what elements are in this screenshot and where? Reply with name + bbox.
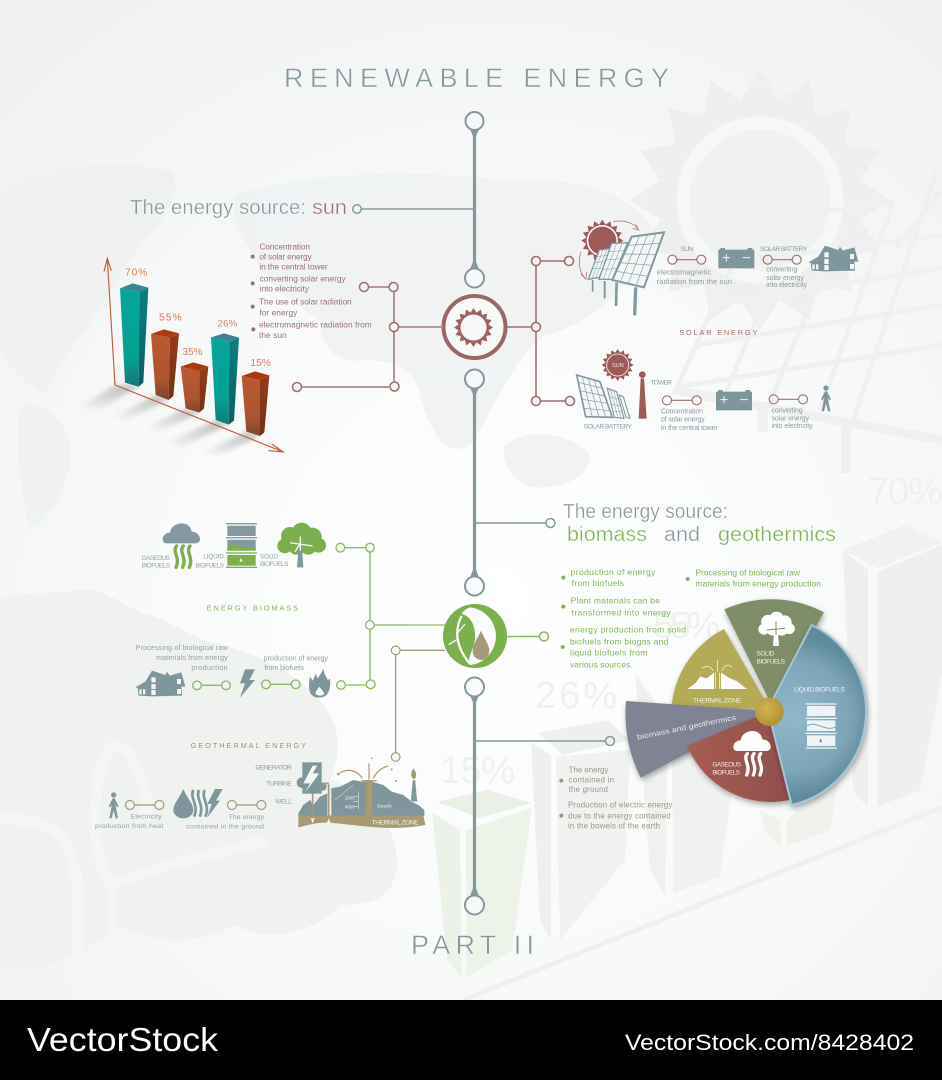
- labels: lower row: solar energy: [772, 416, 809, 423]
- labels: top row: SUN: [681, 246, 694, 253]
- slice: liquid biofuels: LIQUID BIOFUELS: [794, 687, 846, 694]
- heading: biomass and geothermics: biomass: [567, 524, 647, 546]
- labels: geothermal: production from heat: [95, 823, 163, 830]
- labels: biofuels: LIQUID: [203, 554, 224, 561]
- text block: biomass list: from biofuels: [572, 578, 624, 588]
- heading: energy source sun: sun: [312, 197, 347, 219]
- labels: lower row: in the central tower: [661, 425, 718, 432]
- heading: biomass and geothermics: geothermics: [718, 524, 836, 546]
- text: processing: production: [191, 664, 228, 672]
- connector: battery to house: [763, 255, 801, 264]
- slice: thermal zone: THERMAL ZONE: [693, 697, 742, 704]
- watermark: solar panel: [673, 170, 942, 473]
- text block: solar list: [251, 241, 372, 340]
- text block: solar list: the sun: [259, 330, 287, 340]
- watermark: percentages: 26%: [535, 675, 617, 717]
- icon: drop waves bolt: [173, 789, 223, 818]
- icon: thermal zone cross-section: 4800: [345, 804, 355, 809]
- text block: solar list: Concentration: [259, 241, 310, 251]
- watermark: tree canopy: [0, 589, 397, 971]
- labels: geothermal: GENERATOR: [255, 765, 292, 772]
- central spine: [465, 112, 484, 914]
- watermark: world map: [0, 165, 655, 530]
- text block: biomass list: materials from energy production: [695, 579, 821, 589]
- label: geothermal energy: GEOTHERMAL ENERGY: [191, 741, 306, 750]
- icon: gaseous biofuels: [163, 523, 200, 567]
- icon: house: [808, 246, 858, 271]
- connector: sun to battery: [668, 255, 706, 264]
- labels: top row: [657, 246, 808, 289]
- slice: solid biofuels: SOLID: [757, 650, 775, 657]
- text block: geothermal list: Production of electric energy: [568, 801, 672, 810]
- connectors: solar left: [292, 282, 443, 392]
- bar 15%: 15%: [250, 358, 271, 369]
- bar 26%: 26%: [218, 318, 237, 328]
- text block: geothermal list: the ground: [569, 785, 608, 794]
- labels: lower row: Concentration: [661, 408, 703, 415]
- labels: geothermal: [95, 765, 292, 831]
- slice: biomass and geothermics: [625, 701, 757, 778]
- icon: thermal zone cross-section: 2800: [345, 796, 355, 801]
- connector: biomass list node: [507, 632, 548, 641]
- icon: person: [821, 385, 831, 411]
- pie hub: [755, 697, 784, 726]
- panel: energy biomass: [135, 523, 330, 698]
- bar 55%: [151, 313, 182, 400]
- text block: biomass list: transformed into energy: [572, 607, 671, 617]
- labels: lower row: of solar energy: [661, 417, 705, 424]
- chart axes: [104, 258, 283, 452]
- labels: lower row: SOLAR BATTERY: [584, 424, 633, 431]
- slice: thermal zone: [671, 629, 764, 709]
- icon: sun badge: SUN: [612, 363, 624, 369]
- text: processing: Processing of biological raw: [136, 644, 228, 652]
- watermark: large bars: [432, 525, 942, 1000]
- labels: biofuels: BIOFUELS: [142, 563, 170, 570]
- text block: geothermal list: The energy: [569, 765, 608, 774]
- text block: solar list: for energy: [259, 307, 298, 317]
- bar chart: solar percentages: [80, 258, 283, 457]
- text block: biomass list: biofuels from biogas and: [570, 636, 669, 646]
- labels: biofuels: GASEOUS: [142, 555, 170, 562]
- slice: gaseous biofuels: BIOFUELS: [712, 769, 740, 776]
- watermark: percentages: 70%: [868, 471, 942, 513]
- connector: drop to thermal: [227, 800, 266, 809]
- panel: solar energy diagrams: [577, 220, 858, 432]
- slice: liquid biofuels: [772, 625, 866, 805]
- labels: biofuels: SOLID: [260, 553, 278, 560]
- connectors: solar right: [507, 256, 574, 406]
- labels: biofuels: BIOFUELS: [260, 561, 288, 568]
- text block: biomass list: Plant materials can be: [571, 596, 660, 606]
- text block: geothermal list: due to the energy contained: [568, 811, 671, 820]
- icon: battery lower: [716, 390, 752, 410]
- icon: solid biofuels tree: [277, 523, 326, 567]
- bar 55%: 55%: [159, 313, 182, 324]
- labels: top row: SOLAR BATTERY: [760, 246, 808, 253]
- labels: biofuels: BIOFUELS: [195, 562, 224, 569]
- text block: solar list: converting solar energy: [260, 273, 346, 283]
- icon: leaf and drop hub: [443, 604, 507, 668]
- icon: thermal zone cross-section: [297, 757, 425, 828]
- heading: energy source sun: The energy source:: [130, 197, 306, 219]
- text block: biomass list: [561, 567, 821, 669]
- text block: biomass list: energy production from solid: [570, 625, 686, 635]
- text block: biomass list: Processing of biological raw: [695, 567, 801, 577]
- label: solar energy: SOLAR ENERGY: [679, 328, 757, 337]
- connector: battery to person: [769, 395, 807, 404]
- text block: biomass list: various sources.: [570, 659, 633, 669]
- title: RENEWABLE ENERGY: [284, 63, 669, 93]
- text block: solar list: in the central tower: [259, 262, 328, 272]
- panel: geothermal energy: [95, 741, 425, 831]
- text: processing: [136, 644, 328, 672]
- text block: geothermal list: in the bowels of the earth: [568, 821, 660, 830]
- text: processing: from biofuels: [264, 664, 304, 672]
- icon: battery: [718, 248, 754, 268]
- footer title: part II: PART II: [411, 930, 534, 960]
- slice: solid biofuels: [724, 599, 824, 698]
- labels: lower row: TOWER: [650, 380, 672, 387]
- bar shadows: [80, 385, 260, 457]
- icon: liquid biofuels barrel: [226, 523, 257, 568]
- text block: geothermal list: [559, 765, 672, 830]
- text block: geothermal list: contained in: [569, 775, 614, 784]
- bar 35%: 35%: [183, 347, 203, 358]
- label: energy biomass: ENERGY BIOMASS: [207, 604, 298, 613]
- watermark: percentages: [440, 471, 942, 792]
- bar 70%: 70%: [125, 267, 147, 278]
- labels: lower row: [584, 380, 813, 432]
- bar 15%: [242, 358, 271, 436]
- bar 35%: [181, 347, 208, 413]
- connector: tan node: [391, 753, 400, 761]
- icon: person: [109, 792, 119, 818]
- icon: bolt: [240, 669, 255, 698]
- icon: sun badge: [602, 349, 634, 381]
- connector: house to bolt: [193, 681, 230, 690]
- bar 70%: [120, 267, 148, 387]
- heading: biomass and geothermics: and: [664, 524, 700, 546]
- heading: biomass and geothermics: [563, 501, 836, 546]
- labels: geothermal: WELL: [275, 798, 292, 805]
- bar 26%: [211, 318, 239, 425]
- text block: solar list: electromagnetic radiation from: [259, 320, 372, 330]
- text block: biomass list: production of energy: [571, 567, 656, 577]
- watermark: gear: [630, 70, 890, 330]
- connector: pie line: [474, 736, 614, 746]
- labels: geothermal: Electricity: [131, 814, 162, 821]
- watermark: percentages: 15%: [440, 750, 515, 792]
- watermark logo: VectorStock: [27, 1021, 219, 1058]
- connector: tower to battery: [662, 396, 701, 405]
- connector: bolt to flame: [262, 680, 300, 689]
- slice: gaseous biofuels: GASEOUS: [712, 762, 741, 769]
- footer bar: [0, 1000, 942, 1080]
- icon: flame: [309, 668, 330, 698]
- labels: top row: converting: [766, 267, 797, 274]
- connector: person to drop: [125, 800, 164, 809]
- labels: biofuels: [142, 553, 288, 570]
- text block: biomass list: liquid biofuels from: [570, 648, 647, 658]
- slice: biomass and geothermics: biomass and geothermics: [636, 713, 737, 742]
- connectors: biomass: [336, 543, 445, 753]
- heading: energy source sun: [130, 197, 474, 219]
- icon: solar panel array: [577, 375, 630, 418]
- labels: geothermal: contained in the ground: [186, 824, 264, 831]
- pie chart: [625, 599, 866, 805]
- labels: lower row: into electricity: [772, 423, 813, 430]
- labels: top row: electromagnetic: [657, 268, 712, 277]
- icon: house: [135, 671, 185, 696]
- labels: lower row: converting: [772, 408, 803, 415]
- icon: thermal zone cross-section: THERMAL ZONE: [372, 820, 419, 827]
- icon: sun with panels: [579, 220, 664, 315]
- slice: solid biofuels: BIOFUELS: [757, 658, 785, 665]
- icon: tower: [639, 371, 647, 419]
- text block: solar list: into electricity: [260, 284, 310, 294]
- heading: biomass and geothermics: The energy source:: [563, 501, 728, 523]
- slice: gaseous biofuels: [687, 717, 789, 802]
- icon: sun hub: [444, 296, 506, 358]
- icon: thermal zone cross-section: Depth: [377, 804, 392, 810]
- connector: biomass heading line: [474, 518, 555, 528]
- labels: geothermal: TURBINE: [266, 781, 292, 788]
- text: processing: materials from energy: [156, 654, 228, 662]
- labels: top row: solar energy: [766, 275, 804, 282]
- labels: geothermal: The energy: [229, 814, 265, 821]
- labels: top row: radiation from the sun: [657, 277, 732, 286]
- watermark: turbine outline: [0, 745, 265, 1000]
- labels: top row: into electricity: [766, 282, 807, 289]
- watermark: percentages: 55%: [653, 605, 720, 647]
- text block: solar list: of solar energy: [259, 252, 312, 262]
- text block: solar list: The use of solar radiation: [259, 296, 352, 306]
- watermark url: VectorStock.com/8428402: [625, 1030, 914, 1055]
- text: processing: production of energy: [264, 654, 328, 662]
